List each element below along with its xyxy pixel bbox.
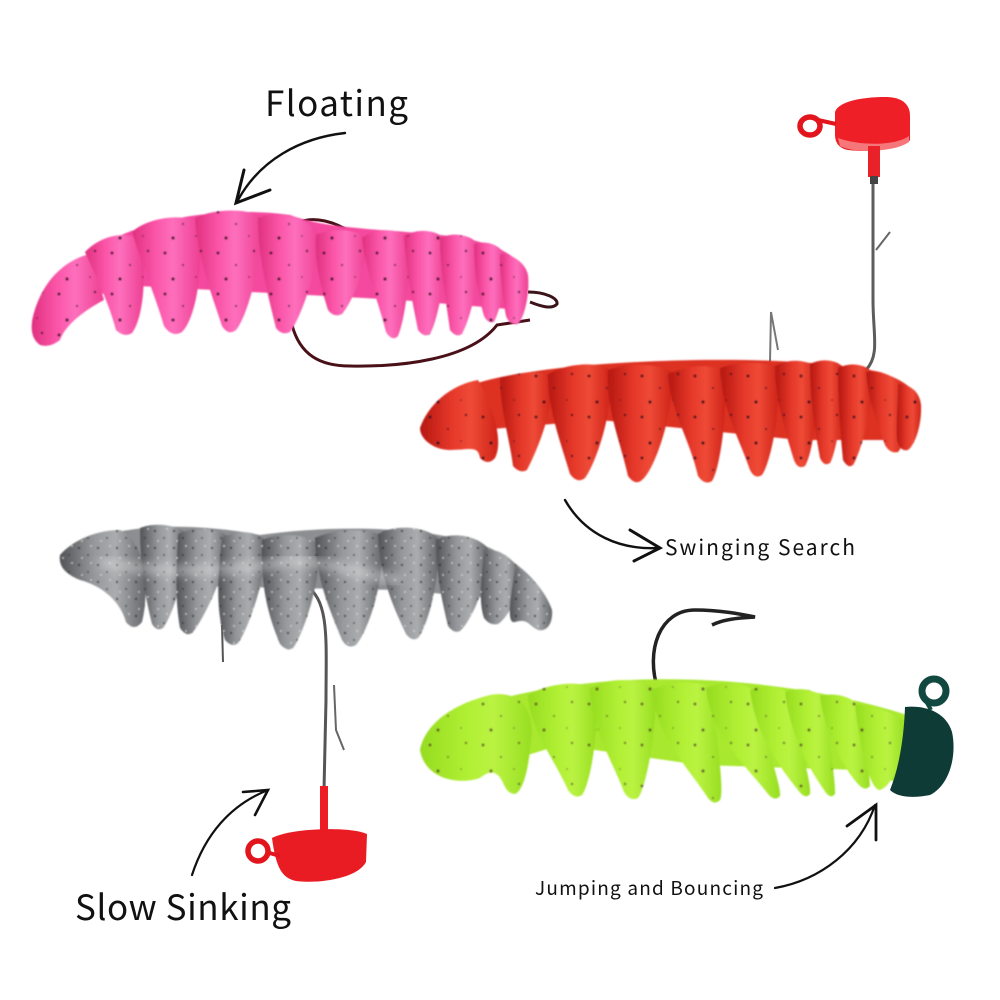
grey slow sinking grub with jig hook (60, 525, 552, 882)
icon: red jig head (248, 786, 367, 882)
icon: dark green jig head (890, 679, 954, 797)
arrow: Slow Sinking to jig head (192, 790, 268, 875)
icon: red jig head (800, 97, 910, 184)
pink floating grub with hook (32, 210, 557, 366)
label: Swinging Search: Swinging Search (665, 532, 855, 562)
title: Floating: Floating (265, 76, 408, 127)
arrow: Floating to pink grub (236, 133, 345, 203)
red swinging grub with jig hook (420, 97, 921, 483)
arrow: to Swinging Search (565, 500, 660, 561)
label: Slow Sinking: Slow Sinking (75, 880, 291, 931)
arrow: Jumping and Bouncing to jig head (775, 805, 876, 888)
label: Jumping and Bouncing: Jumping and Bouncing (535, 874, 763, 901)
green jumping grub with hook and jig head (420, 610, 954, 803)
